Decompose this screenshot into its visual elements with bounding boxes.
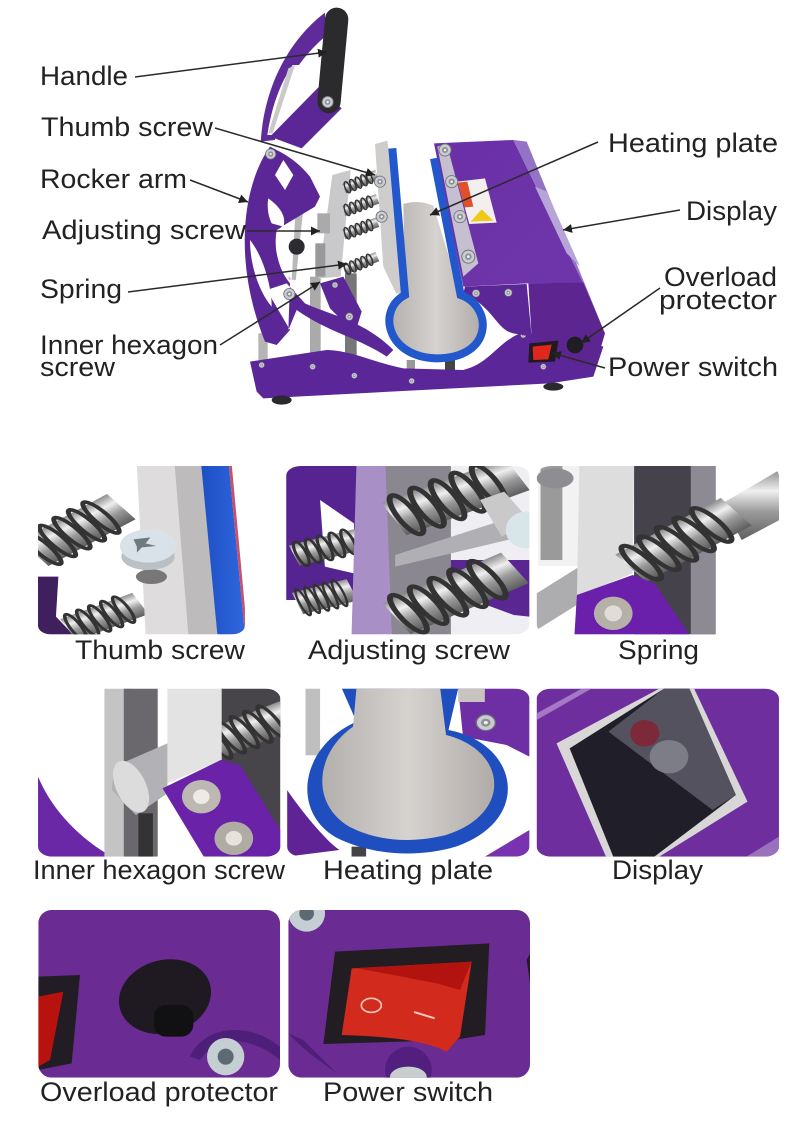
arrow: display — [563, 210, 680, 230]
photo: heating plate — [287, 689, 529, 857]
arrow: inner hexagon screw — [220, 282, 320, 345]
caption: Inner hexagon screw: Inner hexagon screw — [33, 855, 285, 885]
label: Thumb screw: Thumb screw — [41, 112, 214, 142]
arrow: heating plate — [430, 142, 598, 215]
heating body top — [434, 140, 583, 287]
leader lines — [128, 52, 680, 368]
label: Power switch: Power switch — [608, 352, 778, 382]
rocker arm — [245, 147, 393, 357]
arrow: overload protector — [581, 288, 660, 343]
base feet — [272, 383, 563, 405]
heating plate blue edge — [389, 148, 483, 358]
guide rods behind frame — [258, 187, 455, 373]
label: Adjusting screw: Adjusting screw — [42, 215, 247, 245]
right silver flange — [437, 143, 478, 277]
label: Inner hexagon screw — [40, 330, 218, 382]
handle frame — [261, 13, 342, 148]
label: Display: Display — [686, 196, 778, 226]
left silver flange — [375, 141, 408, 295]
photo: thumb screw — [38, 466, 245, 634]
caption: Heating plate: Heating plate — [323, 855, 493, 885]
arrow: power switch — [552, 353, 605, 368]
overload protector button — [567, 337, 583, 353]
caption: Overload protector: Overload protector — [40, 1077, 278, 1107]
arrow: spring — [128, 264, 347, 292]
photo: spring — [537, 466, 779, 634]
photo: display — [537, 689, 779, 857]
label: Spring: Spring — [40, 274, 122, 304]
heating plate gray inner — [389, 202, 483, 358]
photo: adjusting screw — [286, 466, 530, 634]
main machine illustration — [245, 13, 605, 405]
label: Handle: Handle — [40, 61, 128, 91]
display window — [535, 187, 580, 267]
heating body side face — [513, 140, 605, 333]
front bracket — [463, 284, 532, 337]
label: Inner hexagon screw: Inner hexagon — [40, 330, 218, 360]
caption: Adjusting screw: Adjusting screw — [308, 635, 511, 665]
base frame — [250, 333, 603, 398]
third photo row — [38, 910, 530, 1078]
base screws — [259, 282, 589, 384]
arrow: thumb screw — [215, 128, 375, 175]
caption: Display: Display — [612, 855, 704, 885]
heating body end face — [528, 283, 605, 367]
springs — [342, 169, 380, 276]
arrow: handle — [135, 52, 327, 77]
rear spring plate — [318, 170, 351, 278]
flange screws — [374, 144, 512, 297]
label: Inner hexagon screw: screw — [40, 352, 116, 382]
caption: Spring: Spring — [618, 635, 699, 665]
label: Overload protector — [659, 262, 777, 315]
lower link plate — [320, 277, 362, 333]
power switch — [528, 341, 558, 363]
photo: overload protector — [38, 910, 280, 1078]
left linkage — [289, 213, 330, 277]
label: Heating plate: Heating plate — [608, 128, 778, 158]
caption: Power switch: Power switch — [323, 1077, 493, 1107]
caption: Thumb screw: Thumb screw — [75, 635, 246, 665]
handle grip — [329, 19, 337, 102]
rocker arm cut-outs — [250, 160, 295, 307]
photo: power switch — [288, 910, 530, 1078]
label: Overload protector: Overload — [664, 262, 777, 292]
label: Overload protector: protector — [659, 285, 777, 315]
rocker arm screws — [266, 149, 295, 300]
second photo row — [38, 689, 779, 857]
photo: inner hexagon screw — [38, 689, 303, 857]
first photo row — [38, 466, 779, 634]
label: Rocker arm: Rocker arm — [40, 164, 187, 194]
handle pivot screw — [322, 96, 333, 108]
arrow: adjusting screw — [247, 230, 320, 232]
arrow: rocker arm — [190, 180, 248, 202]
warning label — [458, 178, 497, 224]
